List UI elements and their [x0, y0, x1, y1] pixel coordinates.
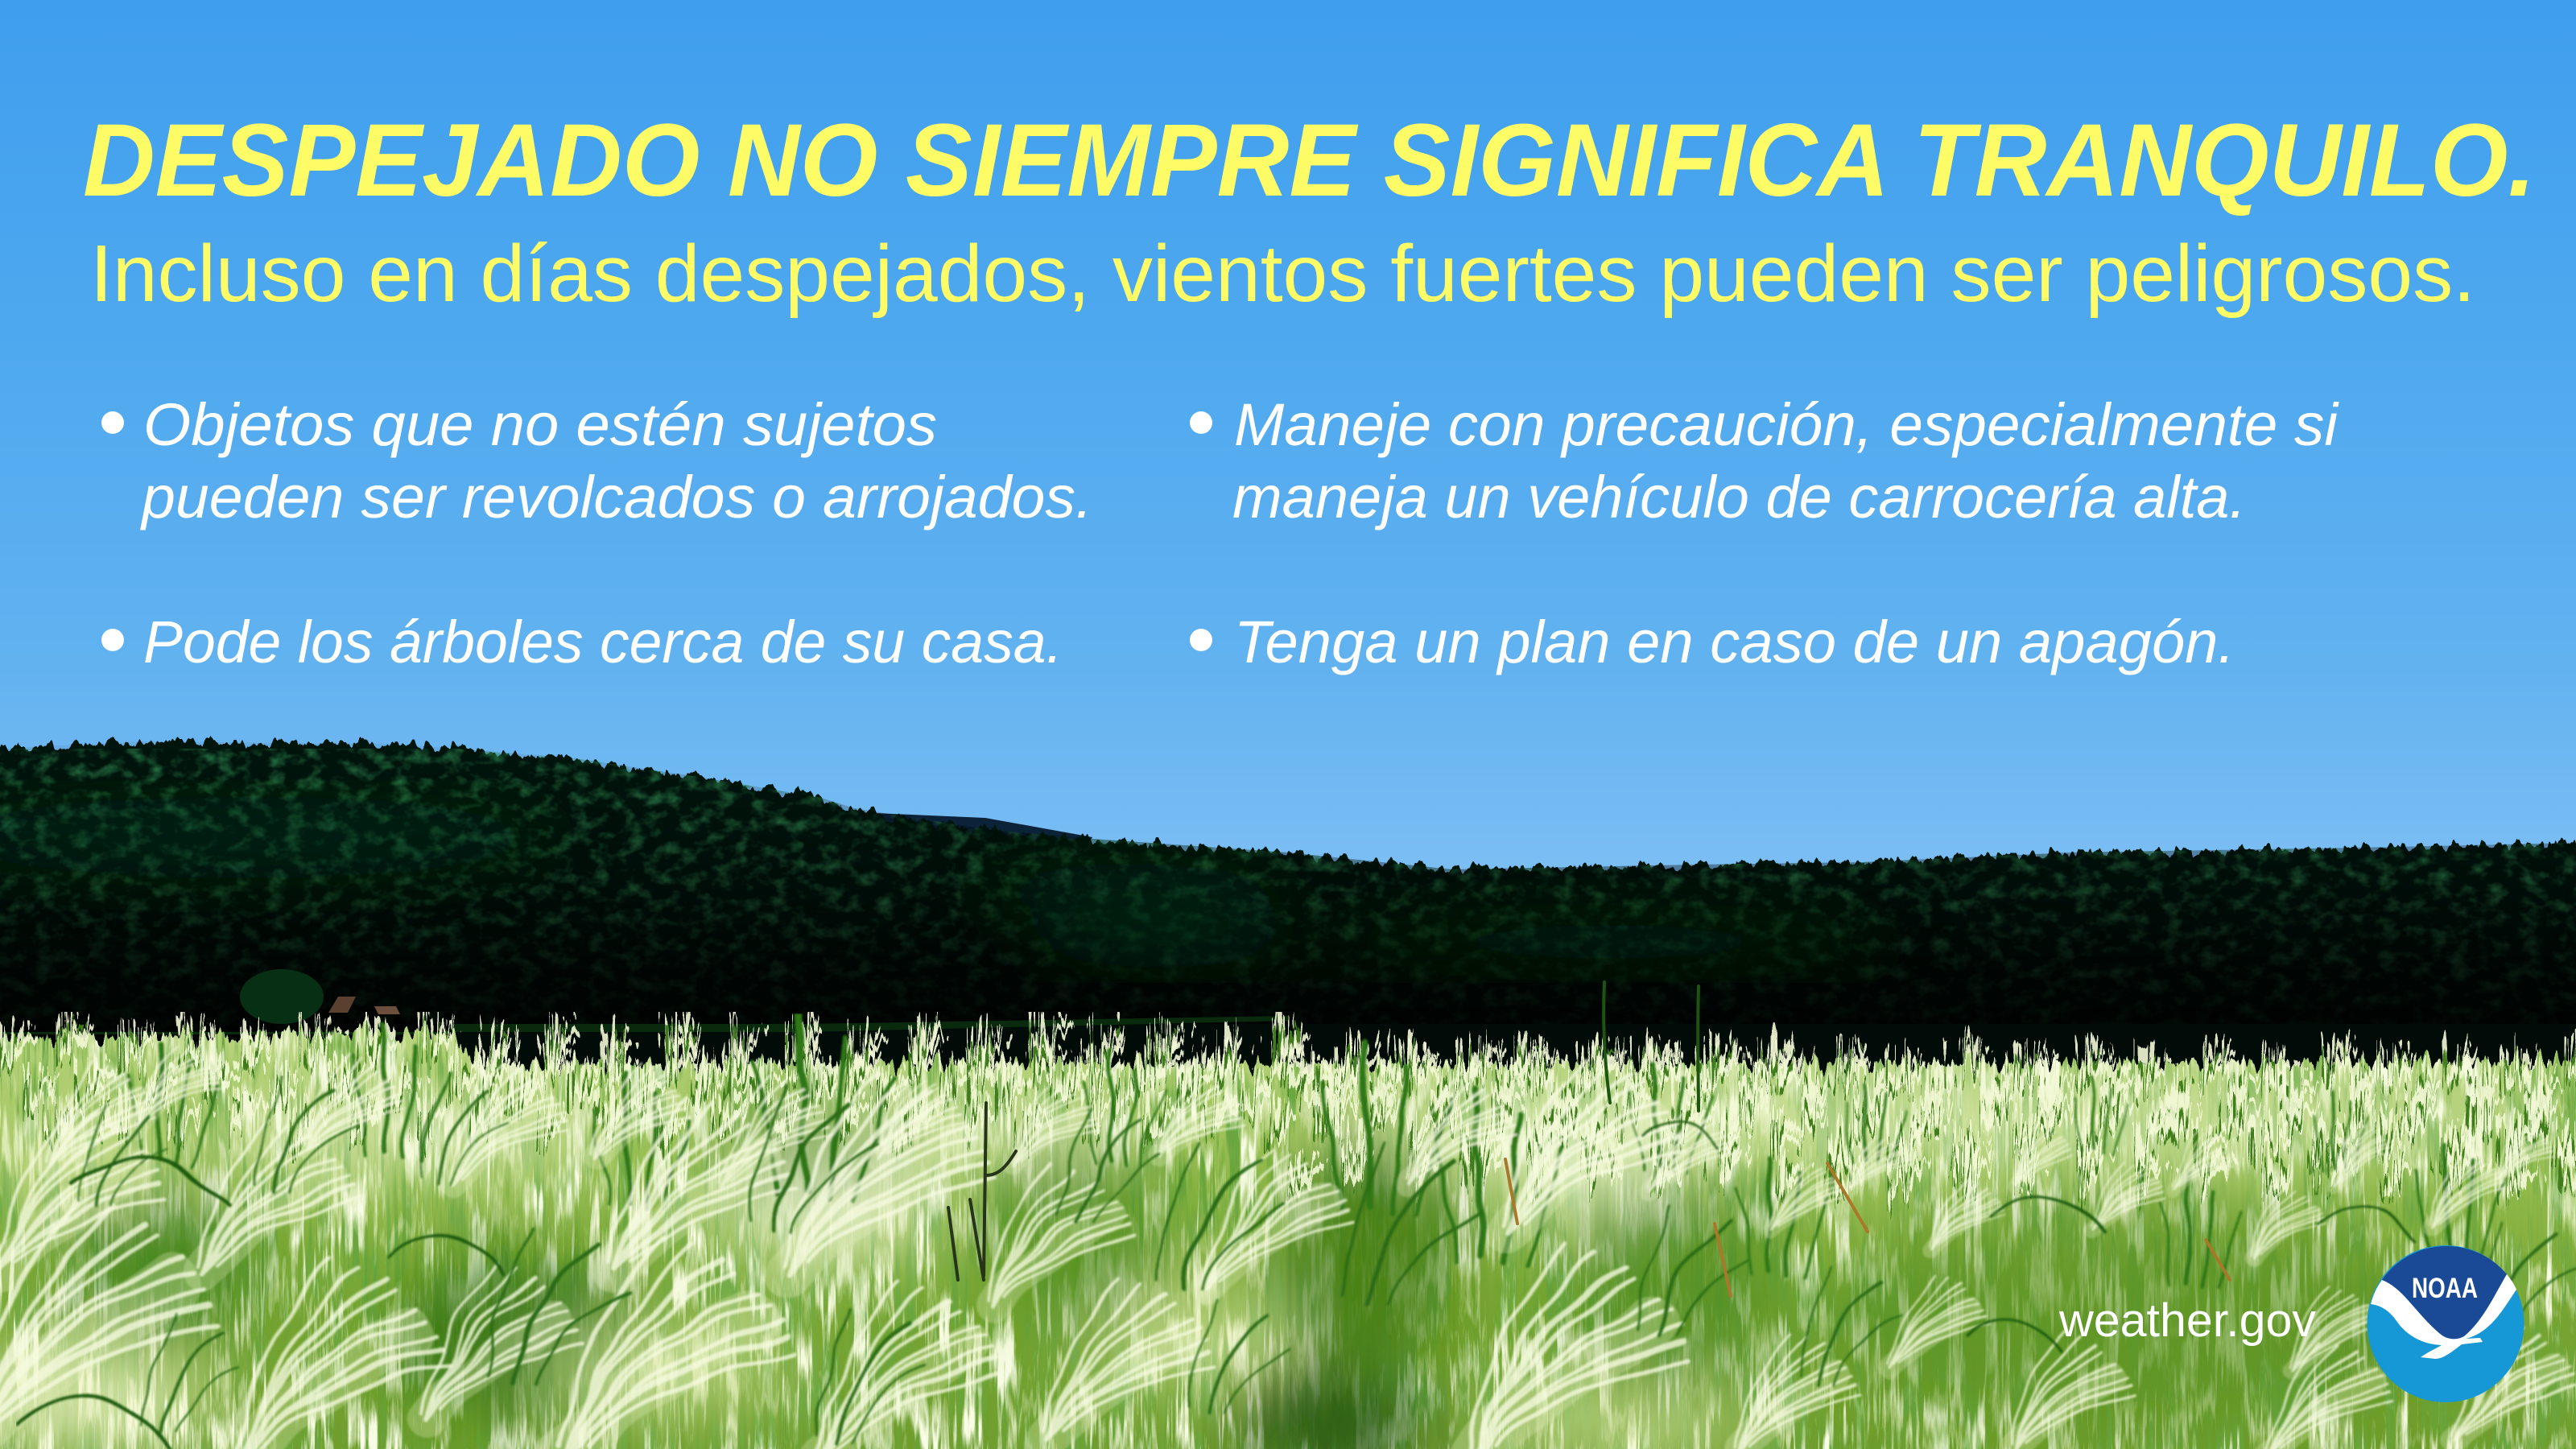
bullet: drive with caution: Maneje con precaución, especialmente si	[1234, 391, 2340, 458]
title: DESPEJADO NO SIEMPRE SIGNIFICA TRANQUILO.	[83, 103, 2536, 218]
far field tufts	[0, 1012, 2576, 1205]
bullet: loose objects: pueden ser revolcados o arrojados.	[140, 464, 1092, 530]
dark awns and arcing stems	[16, 1075, 2576, 1449]
bullet: drive with caution: maneja un vehículo de carrocería alta.	[1232, 464, 2246, 530]
background: sky	[0, 0, 2576, 886]
bullet: loose objects	[101, 391, 1092, 530]
icon: NOAA logo	[2367, 1245, 2524, 1402]
photo: wind-blown grass field	[0, 982, 2576, 1449]
icon: NOAA logo: NOAA	[2412, 1273, 2478, 1304]
background: forested hills	[0, 741, 2576, 1085]
subtitle: Incluso en días despejados, vientos fuertes pueden ser peligrosos.	[90, 229, 2475, 319]
bullet: outage plan: Tenga un plan en caso de un apagón.	[1234, 609, 2235, 675]
bullet: drive with caution	[1190, 391, 2340, 530]
bullet: prune trees: Pode los árboles cerca de su casa.	[143, 609, 1063, 675]
bullet: loose objects: Objetos que no estén sujetos	[143, 391, 937, 458]
near field plumes	[0, 1013, 2576, 1449]
website label: weather.gov	[2058, 1294, 2316, 1347]
